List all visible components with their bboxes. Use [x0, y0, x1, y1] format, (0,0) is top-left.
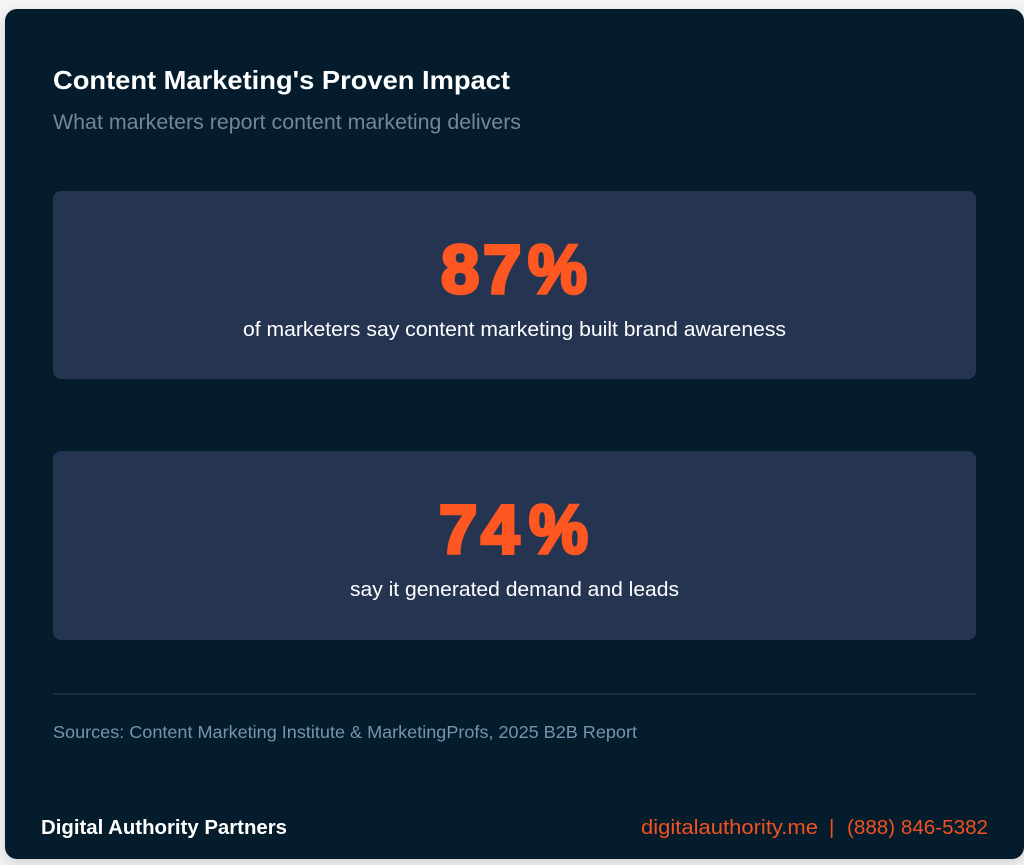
footer contact: |	[829, 816, 834, 839]
panel: 87% stat	[53, 191, 976, 379]
stat: 87%: 87	[441, 231, 521, 308]
sources note: Sources: Content Marketing Institute & MarketingProfs, 2025 B2B Report	[53, 722, 637, 742]
footer contact: (888) 846-5382	[847, 816, 988, 839]
title: Content Marketing's Proven Impact	[53, 65, 510, 95]
stat: 87%	[441, 231, 587, 308]
stat label: demand and leads: say it generated demand and leads	[350, 578, 679, 601]
panel: 74% stat	[53, 451, 976, 640]
stat: 74%: %	[529, 491, 588, 568]
footer brand: Digital Authority Partners	[41, 816, 287, 839]
subtitle: What marketers report content marketing delivers	[53, 110, 521, 134]
footer contact: digitalauthority.me	[641, 816, 818, 839]
footer contact	[641, 816, 988, 839]
stat: 74%	[439, 491, 588, 568]
stat: 87%: %	[528, 231, 587, 308]
stat label: brand awareness: of marketers say content marketing built brand awareness	[243, 318, 786, 341]
stat: 74%: 74	[439, 491, 519, 568]
